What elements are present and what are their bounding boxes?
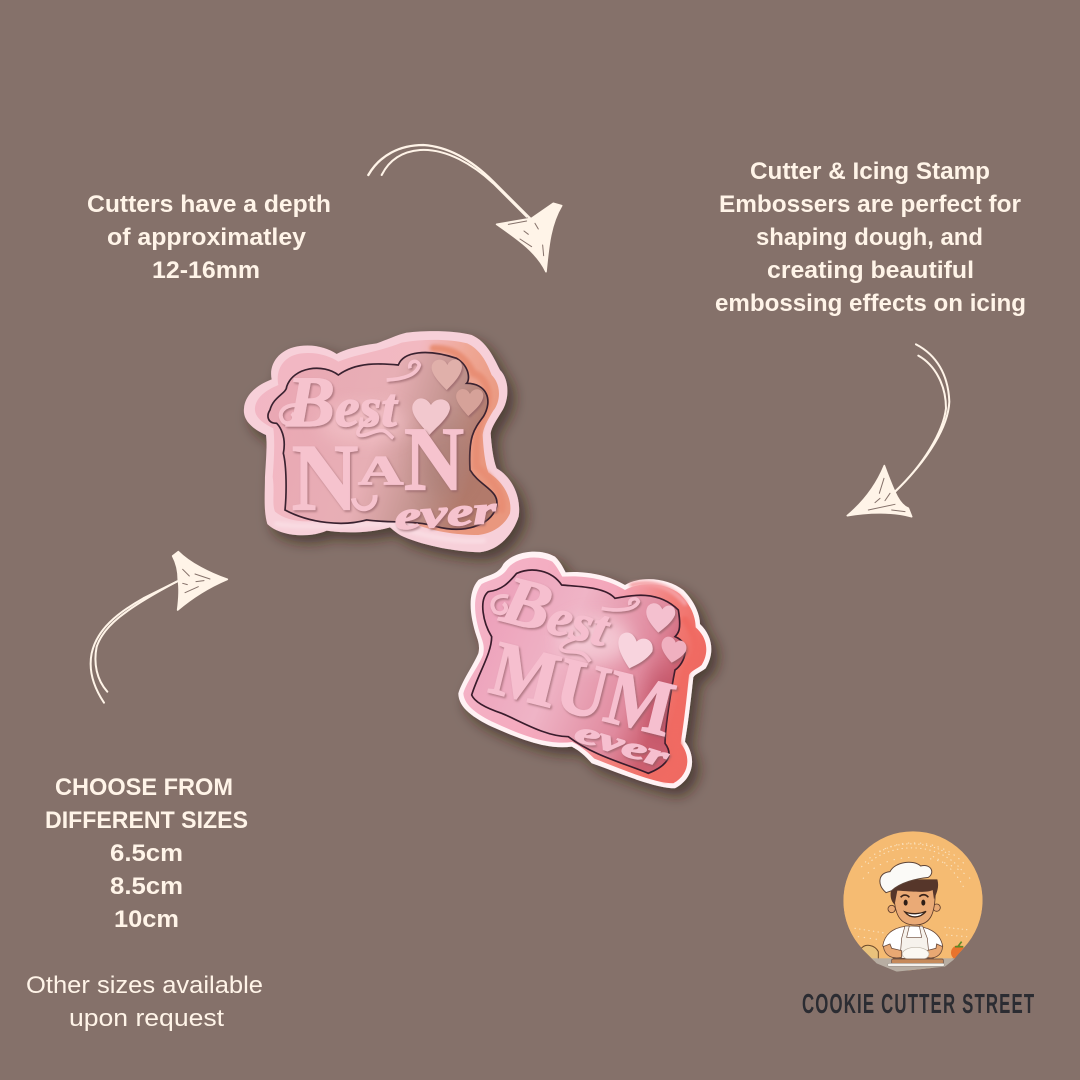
arrow: top curved arrow pointing down right (368, 145, 562, 272)
logo wordmark: COOKIE CUTTER STREET (802, 988, 1034, 1019)
logo background circle (843, 831, 983, 971)
text: cutter and icing stamp description: embossing effects on icing (715, 290, 1026, 317)
cutter base with dark outline (268, 353, 497, 529)
face (888, 905, 895, 913)
lettering: Best NAN ever: A (358, 448, 403, 494)
eyes and smile (904, 900, 908, 906)
sprinkled flour speckles (855, 843, 972, 940)
arrow: right curved arrow pointing down left (847, 344, 949, 517)
lettering: Best NAN ever: N (292, 424, 358, 530)
text: size options: DIFFERENT SIZES (45, 807, 248, 834)
table (872, 958, 955, 972)
text: cutter and icing stamp description (715, 158, 1026, 317)
logo: chef illustration (843, 831, 983, 975)
lettering: Best NAN ever: Best (286, 363, 398, 442)
base soft shading (558, 617, 675, 747)
hearts (618, 603, 686, 668)
text: size options (45, 774, 248, 933)
text: size options: CHOOSE FROM (55, 774, 233, 801)
cutter outer rim (244, 331, 519, 552)
lettering: Best NAN ever: ever (393, 487, 499, 539)
text: cutter depth: of approximatley (107, 224, 307, 251)
text: size options: 10cm (114, 906, 179, 933)
text: cutter and icing stamp description: Cutter & Icing Stamp (750, 158, 990, 185)
base soft shading (320, 403, 470, 497)
lettering: Best MUM ever: MUM (483, 624, 683, 753)
chef hat (880, 862, 932, 893)
text: other sizes note: upon request (69, 1005, 224, 1032)
rim colour bands (632, 583, 696, 778)
text: other sizes note: Other sizes available (26, 972, 263, 999)
lettering: Best MUM ever: Best (494, 561, 620, 661)
text: size options: 6.5cm (110, 840, 183, 867)
hearts (412, 360, 483, 435)
cookie cutter: Best Nan Ever (244, 331, 519, 552)
cookie cutter: Best Mum Ever (458, 552, 711, 788)
arrow: lower left curved arrow pointing up right (91, 552, 227, 703)
text: cutter and icing stamp description: creating beautiful (767, 257, 974, 284)
cutter base with dark outline (472, 570, 685, 773)
chef body and apron (883, 926, 943, 958)
cutter inner wall (255, 340, 510, 535)
text: cutter depth: Cutters have a depth (87, 191, 331, 218)
lettering: Best NAN ever: N (404, 408, 464, 509)
text: cutter and icing stamp description: shaping dough, and (756, 224, 983, 251)
text: other sizes note (26, 972, 263, 1032)
lettering: Best NAN ever (281, 361, 499, 539)
hair (891, 879, 938, 905)
lettering: Best MUM ever: ever (571, 714, 674, 775)
cutter inner wall (463, 558, 706, 783)
text: cutter depth: 12-16mm (152, 257, 260, 284)
rim colour bands (277, 348, 502, 541)
lettering: Best MUM ever (483, 561, 683, 775)
cutter outer rim (458, 552, 711, 788)
text: size options: 8.5cm (110, 873, 183, 900)
text: cutter and icing stamp description: Embossers are perfect for (719, 191, 1021, 218)
pastry and tomato (861, 945, 878, 962)
arms and dough (883, 944, 902, 958)
text: cutter depth (87, 191, 331, 284)
